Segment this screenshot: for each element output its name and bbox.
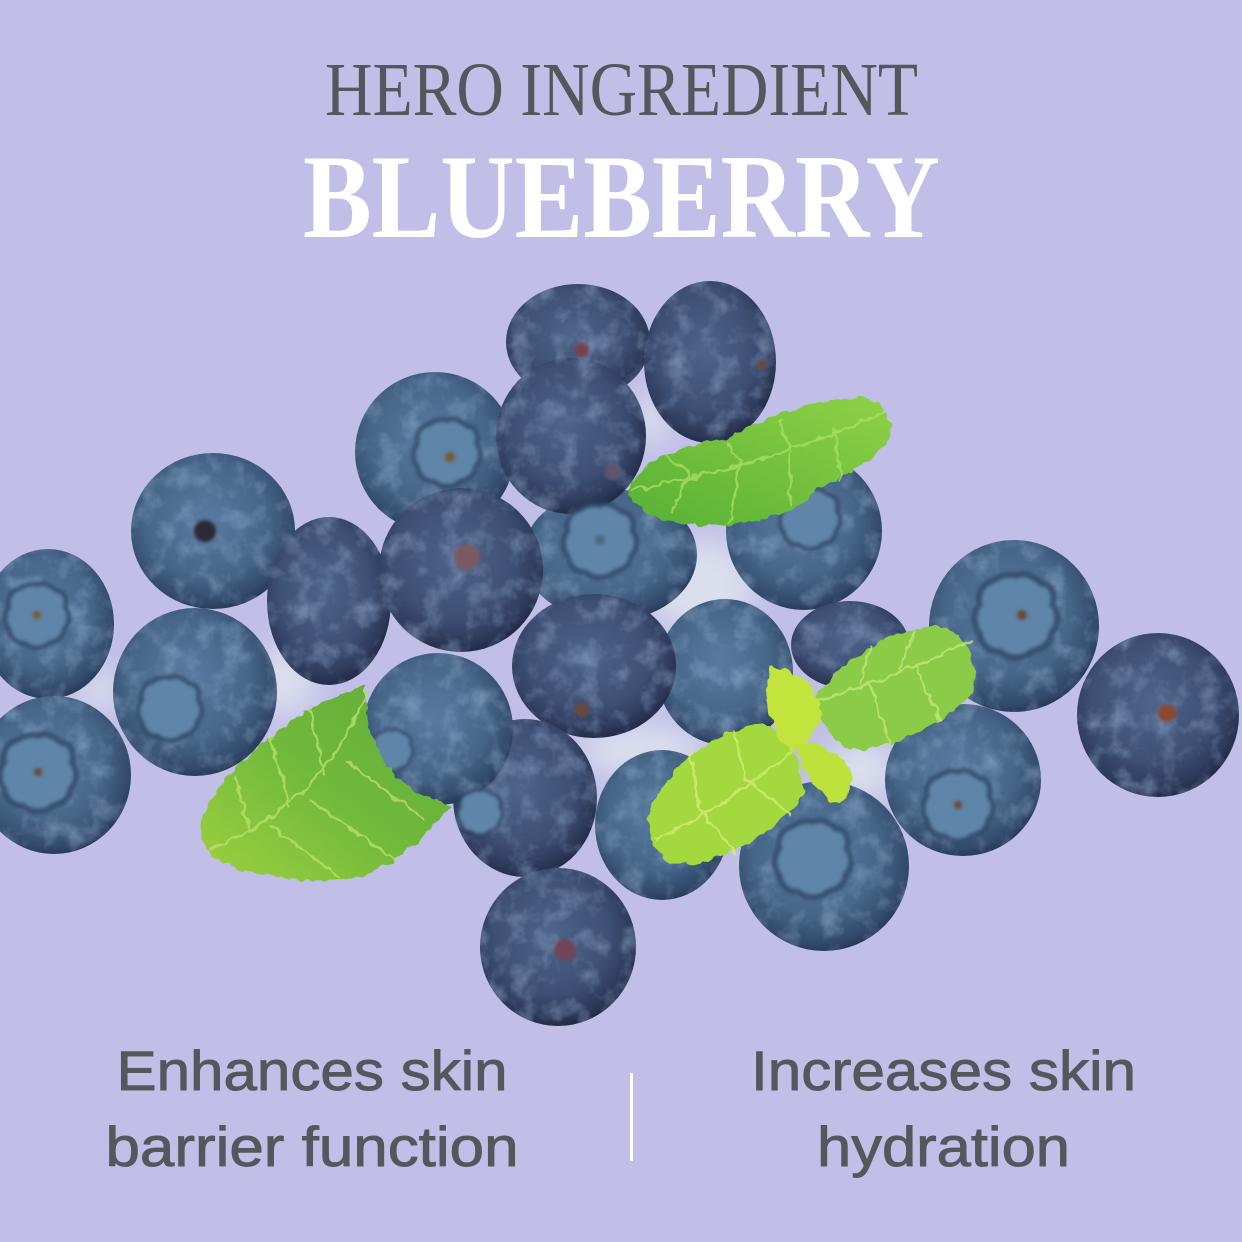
heading: hero ingredient: HERO INGREDIENT <box>325 48 918 132</box>
blueberries <box>0 281 1239 1026</box>
berry calyx stars <box>0 419 1057 897</box>
benefit: skin hydration: Increases skin <box>751 1039 1136 1102</box>
mint leaf: bottom left <box>201 685 450 880</box>
benefit: skin hydration: hydration <box>817 1115 1070 1178</box>
benefit: skin hydration <box>751 1039 1136 1178</box>
mint sprig: top small leaf <box>766 667 821 752</box>
mint sprig: right leaf <box>815 625 975 750</box>
benefit: skin barrier <box>106 1039 518 1178</box>
benefit: skin barrier: Enhances skin <box>116 1039 508 1102</box>
heading: blueberry: BLUEBERRY <box>303 130 940 263</box>
mint leaf: top right <box>627 398 890 526</box>
pale background shadows <box>80 395 895 798</box>
blueberry and mint photo cluster <box>0 281 1239 1026</box>
mint sprig: bottom small leaf <box>795 743 853 805</box>
divider <box>630 1073 633 1161</box>
berry stem scars <box>33 343 1176 961</box>
benefit: skin barrier: barrier function <box>106 1115 518 1178</box>
mint sprig: lower leaf <box>648 723 802 865</box>
